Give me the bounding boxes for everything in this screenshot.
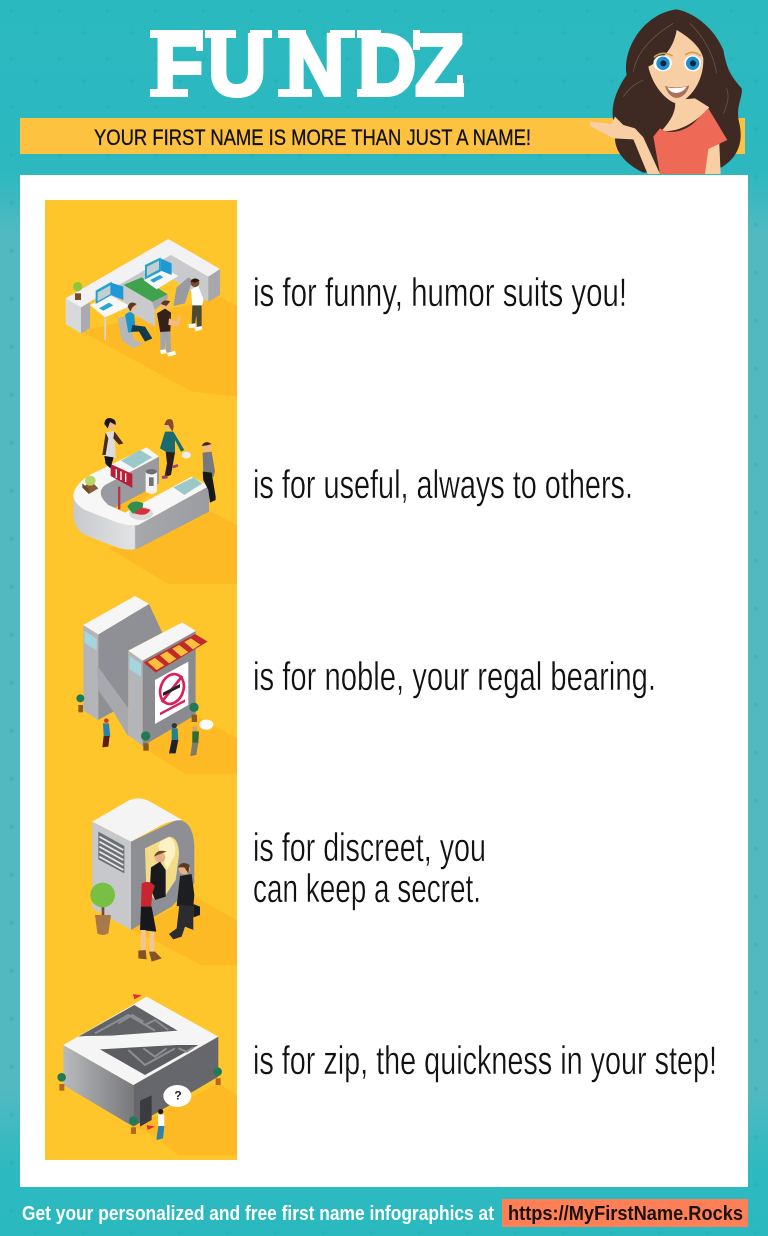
desk block walls [66, 298, 81, 333]
salad bowl [82, 476, 98, 494]
row text: D: can keep a secret. [253, 867, 481, 911]
left face [92, 822, 131, 930]
person teal [169, 723, 178, 753]
potted plants [76, 694, 199, 751]
illustration: Z maze [57, 994, 237, 1155]
front face [131, 820, 194, 930]
yellow illustration column [45, 200, 237, 1160]
woman with red hair [138, 882, 162, 962]
watermelon plate [127, 501, 153, 520]
left top [83, 596, 149, 634]
person green with bubble [190, 720, 213, 756]
potted tree [90, 883, 115, 935]
illustration: F office [66, 239, 237, 397]
right face [133, 1037, 218, 1127]
pink shirt [653, 108, 727, 174]
green partition [123, 277, 168, 327]
person with question bubble [156, 1085, 191, 1140]
flags [133, 994, 155, 1130]
face [648, 30, 703, 104]
man in doorway [150, 851, 167, 900]
server man right [202, 442, 216, 503]
person with question bubble: ? [174, 1089, 182, 1103]
illustration: cartoon woman presenting [590, 9, 742, 174]
shadow [132, 897, 237, 965]
right pillar right face [143, 631, 196, 746]
illustration: U food counter [73, 418, 237, 584]
right top [128, 622, 196, 661]
arm and open hand [590, 117, 660, 174]
left face [63, 1045, 133, 1127]
plant [73, 282, 82, 300]
illustration: N building [76, 596, 237, 774]
desks with monitors [90, 257, 178, 340]
title: FUNDZ [154, 16, 464, 114]
hair [613, 9, 742, 173]
banner text: YOUR FIRST NAME IS MORE THAN JUST A NAME! [94, 125, 531, 150]
vent [98, 832, 124, 873]
red sign [111, 464, 132, 509]
man with briefcase [169, 863, 200, 939]
left pillar face [83, 625, 98, 720]
woman with tray left [102, 418, 123, 468]
counter inner wall [101, 457, 159, 513]
diagonal face [97, 665, 128, 737]
back face [98, 604, 162, 720]
potted plants [57, 1067, 222, 1134]
shadow [82, 297, 237, 397]
footer call to action: Get your personalized and free first name infographics at [22, 1203, 494, 1225]
smile [665, 85, 689, 98]
glass trays [121, 450, 202, 495]
no smoking poster [155, 662, 188, 724]
upper maze [78, 1005, 178, 1037]
striped awning [144, 634, 208, 673]
row text: F: is for funny, humor suits you! [253, 271, 627, 315]
door [140, 1095, 152, 1127]
counter front face [73, 486, 209, 550]
white content panel [20, 175, 748, 1187]
hair highlights [623, 23, 728, 113]
shadow [133, 1083, 237, 1155]
empty chair [173, 277, 192, 306]
white top [66, 239, 220, 307]
seated person [118, 302, 152, 348]
top [92, 798, 182, 842]
yellow banner [20, 118, 745, 154]
lower maze [100, 1045, 198, 1075]
row text: D: is for discreet, you [253, 826, 486, 870]
right arm [704, 143, 721, 174]
person red hair [102, 718, 110, 747]
shadow [108, 510, 237, 584]
eyes [653, 52, 701, 71]
trash bin [146, 469, 157, 494]
top of Z [63, 997, 218, 1085]
shadow [142, 715, 237, 774]
footer url badge: https://MyFirstName.Rocks [508, 1203, 743, 1225]
glass [84, 631, 141, 677]
door opening [145, 837, 179, 900]
standing man dark skin [188, 278, 204, 331]
row text: U: is for useful, always to others. [253, 463, 633, 507]
counter top [73, 447, 209, 525]
row text: D [253, 826, 486, 911]
illustration: D building [90, 798, 237, 965]
woman walking [160, 419, 191, 479]
standing person with mug [157, 300, 180, 357]
neck and chest [662, 98, 709, 131]
right pillar left face [128, 651, 143, 746]
